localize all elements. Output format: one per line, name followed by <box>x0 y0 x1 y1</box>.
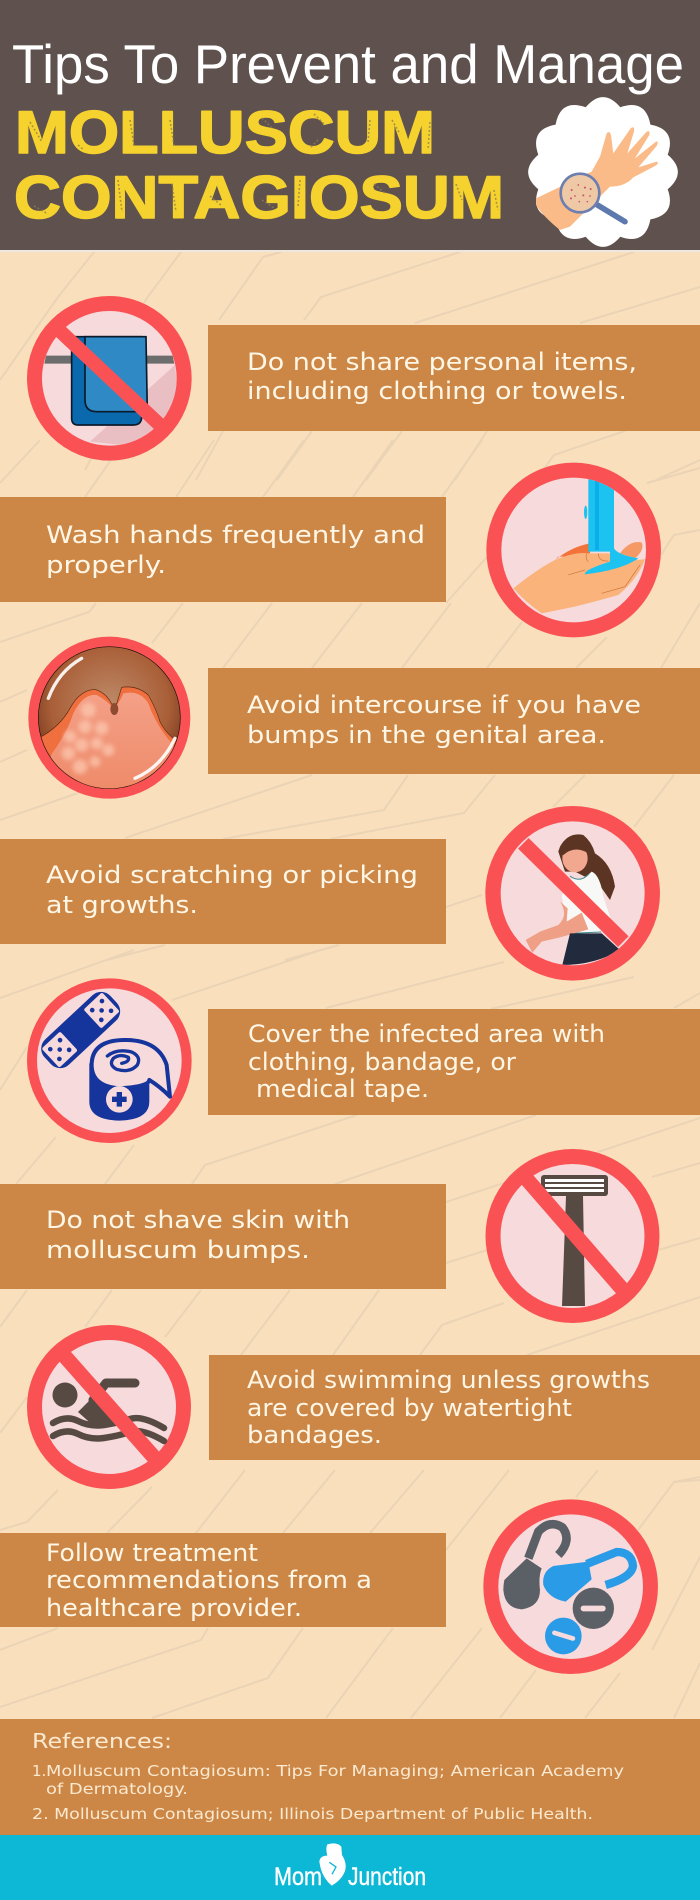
icon: bandages <box>32 983 187 1138</box>
tip text: medical tape. <box>256 1075 429 1103</box>
tip 1: personal items <box>34 303 700 453</box>
tip text: bandages. <box>247 1421 382 1449</box>
tip bar <box>208 325 700 431</box>
references panel <box>0 1719 700 1835</box>
tip text <box>46 1206 350 1264</box>
logo mother and child heart <box>319 1843 346 1886</box>
tip text: molluscum bumps. <box>46 1236 310 1264</box>
tip bar <box>209 1355 700 1460</box>
tip text <box>46 1539 372 1622</box>
tip text: Do not shave skin with <box>46 1206 350 1234</box>
tip 5: cover infected area <box>32 983 700 1138</box>
tip text: bumps in the genital area. <box>247 721 606 749</box>
icon: prohibited swimmer <box>34 1332 184 1482</box>
tip text: Avoid scratching or picking <box>46 861 418 889</box>
tip text: at growths. <box>46 891 198 919</box>
tip text <box>248 1020 605 1103</box>
header panel <box>0 0 700 252</box>
tip 2: wash hands <box>0 470 653 630</box>
reference 1 <box>32 1762 624 1798</box>
icon: prohibited razor <box>493 1156 652 1316</box>
footer with MomJunction logo <box>0 1835 700 1900</box>
tip text: properly. <box>46 551 166 579</box>
logo wordmark: Junction <box>348 1863 426 1891</box>
title line: CONTAGIOSUM: CONTAGIOSUM <box>14 164 504 231</box>
tip 8: follow treatment <box>0 1507 650 1666</box>
reference 2: 2. Molluscum Contagiosum; Illinois Department of Public Health. <box>32 1805 593 1823</box>
tip bar <box>0 497 446 602</box>
icon: washing hand <box>494 470 653 630</box>
tip text <box>46 521 425 579</box>
tip text: recommendations from a <box>46 1566 372 1594</box>
tip bar <box>0 1533 446 1627</box>
icon: hand under magnifying glass in scalloped badge <box>528 97 678 247</box>
tip 6: do not shave <box>0 1156 652 1316</box>
tip bar <box>0 839 446 944</box>
tip 7: avoid swimming <box>34 1332 700 1482</box>
tip text: Avoid intercourse if you have <box>247 691 641 719</box>
logo wordmark: Mom <box>274 1863 322 1891</box>
icon: prohibited scratching woman <box>493 814 652 973</box>
tip 4: avoid scratching <box>0 814 652 973</box>
icon: genital area illustration <box>28 637 190 799</box>
tip bar <box>0 1184 446 1289</box>
reference 1: of Dermatology. <box>46 1780 188 1798</box>
title line: Tips To Prevent and Manage: Tips To Prevent and Manage <box>12 33 684 95</box>
tip text <box>247 691 641 749</box>
title line: MOLLUSCUM: MOLLUSCUM <box>15 99 435 166</box>
tip text: are covered by watertight <box>247 1394 572 1422</box>
references heading: References: <box>32 1729 172 1753</box>
tip text: clothing, bandage, or <box>248 1048 516 1076</box>
tip bar <box>208 668 700 774</box>
tip text: healthcare provider. <box>46 1594 302 1622</box>
reference 1: Molluscum Contagiosum: Tips For Managing; American Academy <box>46 1762 624 1780</box>
reference 1: 1. <box>32 1762 46 1780</box>
tip 3: avoid intercourse <box>28 637 700 799</box>
tip bar <box>208 1009 700 1115</box>
icon: pills and capsules <box>491 1507 650 1666</box>
tip text: Cover the infected area with <box>248 1020 605 1048</box>
tip text <box>247 348 637 405</box>
tip text <box>247 1366 650 1449</box>
tip text: Avoid swimming unless growths <box>247 1366 650 1394</box>
icon: prohibited towel <box>34 303 184 453</box>
tip text: Wash hands frequently and <box>46 521 425 549</box>
tip text: including clothing or towels. <box>247 377 627 405</box>
tip text: Do not share personal items, <box>247 348 637 376</box>
tip text <box>46 861 418 919</box>
tip text: Follow treatment <box>46 1539 258 1567</box>
